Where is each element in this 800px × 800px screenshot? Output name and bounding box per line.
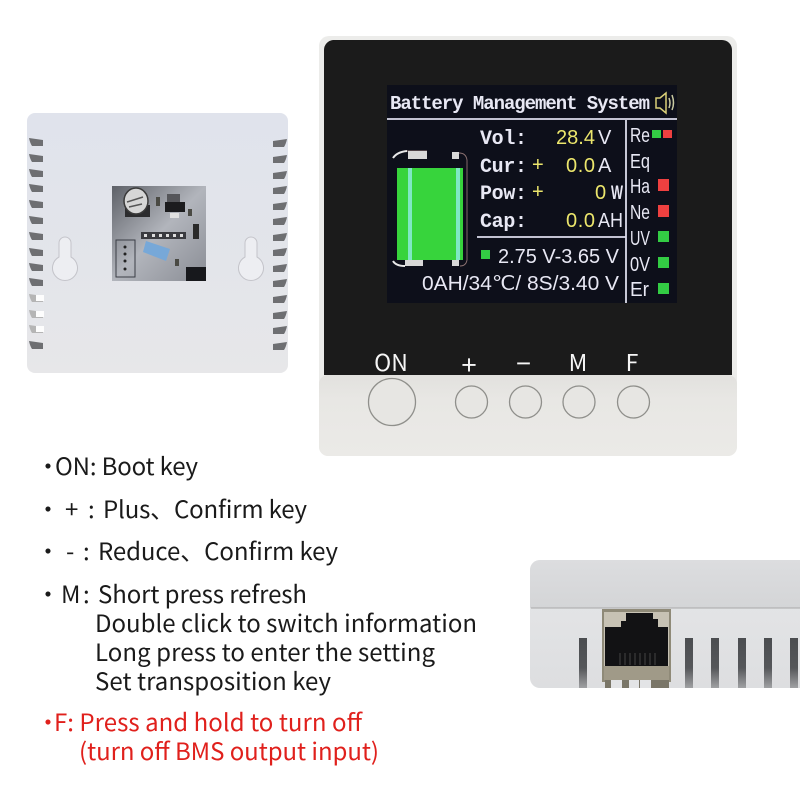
readout values: W xyxy=(611,183,623,204)
button labels: F xyxy=(626,344,639,378)
M key: Long press to enter the setting xyxy=(95,633,435,668)
minus key: - xyxy=(66,532,74,567)
F key warning: F: Press and hold to turn off xyxy=(54,703,364,738)
button labels: − xyxy=(516,348,531,378)
status column: Er xyxy=(630,279,649,301)
F key warning: (turn off BMS output input) xyxy=(79,732,379,767)
connector outline xyxy=(116,240,135,277)
plus key: + xyxy=(65,490,78,525)
minus key: Reduce、Confirm key xyxy=(98,532,338,567)
readout values: 0.0 xyxy=(566,210,595,232)
regulator chip xyxy=(165,202,185,212)
M key: Double click to switch information xyxy=(95,604,477,639)
range and status lines: 0AH/34℃/ 8S/3.40 V xyxy=(422,273,620,295)
readout values: AH xyxy=(598,210,623,232)
capacitor xyxy=(125,205,150,217)
screen dividers xyxy=(387,119,677,303)
status column: 0V xyxy=(630,254,651,276)
range and status lines: 2.75 V-3.65 V xyxy=(498,246,620,268)
readout values: A xyxy=(598,155,612,177)
minus key: · xyxy=(36,532,60,567)
ON key: · xyxy=(36,447,60,482)
readout values xyxy=(532,127,623,232)
key descriptions xyxy=(36,447,477,767)
plus key: : xyxy=(88,490,95,525)
keyhole mounting slots xyxy=(53,237,264,280)
icon: speaker xyxy=(656,93,674,113)
vent slots xyxy=(579,638,798,688)
button labels: + xyxy=(461,350,477,380)
M key: Short press refresh xyxy=(98,575,307,610)
status column: Re xyxy=(630,125,650,147)
M key: · xyxy=(36,575,60,610)
status column: Ha xyxy=(630,176,651,198)
status column xyxy=(630,125,672,301)
plus key: Plus、Confirm key xyxy=(103,490,307,525)
status column: Eq xyxy=(630,151,650,173)
M key: : xyxy=(83,575,90,610)
panel: device back view xyxy=(27,113,288,373)
F key warning xyxy=(36,703,379,767)
F key warning: · xyxy=(36,703,60,738)
M key: M xyxy=(61,575,80,610)
circuit board window xyxy=(112,186,206,281)
black socket xyxy=(186,267,206,281)
black front bezel xyxy=(324,40,732,375)
readout labels xyxy=(480,128,527,234)
icon: battery xyxy=(393,151,467,266)
status column: Ne xyxy=(630,202,650,224)
button labels: M xyxy=(569,344,587,378)
M key xyxy=(36,575,477,697)
header pins xyxy=(141,232,186,239)
readout values: + xyxy=(532,181,544,203)
M key: Set transposition key xyxy=(95,662,331,697)
readout labels: Pow: xyxy=(480,183,527,206)
button labels xyxy=(374,344,639,380)
ON key: ON: Boot key xyxy=(55,447,198,482)
panel: device side view with RJ45 port xyxy=(530,560,800,688)
smd parts xyxy=(156,197,160,206)
readout labels: Cur: xyxy=(480,156,527,179)
plus key: · xyxy=(36,490,60,525)
RJ45 port xyxy=(602,609,671,688)
right vent slots xyxy=(273,139,287,350)
screen title: Battery Management System xyxy=(390,93,650,115)
button labels: ON xyxy=(374,344,408,378)
screen xyxy=(387,85,677,303)
readout values: V xyxy=(598,127,612,149)
left vent slots showing through xyxy=(29,294,44,333)
range and status lines xyxy=(422,246,620,295)
buttons xyxy=(368,378,650,426)
readout values: 0 xyxy=(595,182,606,204)
device body xyxy=(319,36,737,456)
readout values: 28.4 xyxy=(556,127,595,149)
left vent slots xyxy=(29,138,43,349)
minus key: : xyxy=(83,532,90,567)
readout values: + xyxy=(532,154,544,176)
readout values: 0.0 xyxy=(566,155,595,177)
panel: device front view xyxy=(319,36,737,456)
readout labels: Cap: xyxy=(480,211,527,234)
status column: UV xyxy=(630,228,650,250)
readout labels: Vol: xyxy=(480,128,527,151)
blue label xyxy=(143,241,170,261)
